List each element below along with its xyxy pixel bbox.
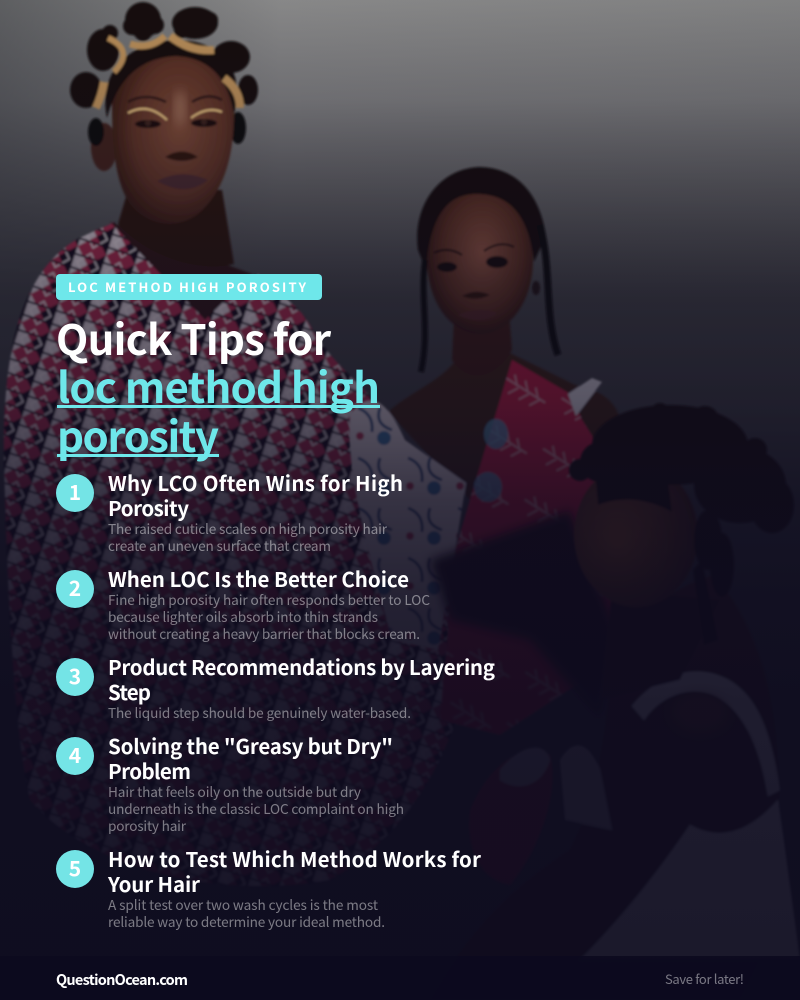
head: woman one — [112, 50, 234, 224]
tip 2 — [56, 563, 430, 643]
tip 4 body: Hair that feels oily on the outside but dry — [108, 781, 361, 801]
hair knots — [70, 2, 258, 108]
tip 2 body — [108, 589, 430, 643]
photo: woman two with braids — [349, 167, 630, 735]
tip 2 body: without creating a heavy barrier that blocks cream. — [108, 623, 420, 643]
number badge 4 — [56, 737, 94, 775]
shoulder highlight — [672, 692, 728, 732]
tip 2 heading: When LOC Is the Better Choice — [108, 563, 409, 593]
title — [56, 307, 380, 465]
number badge 3 — [56, 658, 94, 696]
number badge 1 — [56, 474, 94, 512]
chest skin: woman one — [110, 222, 252, 320]
garment: woman one — [4, 222, 470, 886]
tip 1 heading: Why LCO Often Wins for High — [108, 467, 403, 497]
tip 4 heading — [108, 730, 393, 785]
face features: woman two — [434, 244, 540, 320]
tip 3 body: The liquid step should be genuinely water-based. — [108, 702, 411, 722]
tip 5 body: A split test over two wash cycles is the most — [108, 894, 378, 914]
head: woman two — [427, 186, 533, 334]
tip 4 heading: Problem — [108, 755, 191, 785]
number badge 5 — [56, 850, 94, 888]
body and arm: woman three — [430, 575, 779, 1000]
title highlight line 1: loc method high — [57, 355, 380, 416]
neck: woman one — [118, 190, 234, 266]
tip 3 heading: Product Recommendations by Layering — [108, 651, 495, 681]
photo: woman one with bantu knots — [4, 2, 470, 886]
footer brand: QuestionOcean.com — [56, 969, 188, 990]
tip 1 heading: Porosity — [108, 492, 189, 522]
tip 2 body: Fine high porosity hair often responds better to LOC — [108, 589, 430, 609]
neck: woman two — [452, 300, 512, 375]
sleeve and garment detail — [469, 746, 612, 885]
head: woman three — [574, 463, 698, 607]
number badge 2 — [56, 570, 94, 608]
hair: woman two — [417, 167, 546, 270]
tag badge — [56, 274, 322, 300]
tip 4 body: porosity hair — [108, 815, 187, 835]
tip 1 body — [108, 518, 388, 555]
tip 5 body: reliable way to determine your ideal method. — [108, 911, 385, 931]
tip 4 body: underneath is the classic LOC complaint on high — [108, 798, 404, 818]
dress: blue flowers — [474, 419, 508, 502]
dress: white floral panel — [349, 400, 466, 650]
number badge 5: 5 — [69, 853, 81, 883]
footer save note: Save for later! — [665, 969, 744, 988]
tip 4 body — [108, 781, 404, 835]
shoulders: woman two — [388, 352, 622, 520]
tip 5 heading — [107, 843, 481, 898]
title highlight line 2: porosity — [57, 404, 219, 465]
tip 3 — [56, 651, 495, 722]
number badge 4: 4 — [69, 740, 81, 770]
footer band — [0, 956, 800, 1000]
tip 4 heading: Solving the "Greasy but Dry" — [108, 730, 393, 760]
ear and side hair — [88, 112, 246, 171]
dress: red floral panel — [440, 360, 630, 735]
tip 4 — [56, 730, 404, 835]
face features: woman one — [128, 90, 222, 189]
photo: woman three in front — [430, 403, 800, 1000]
neck: woman three — [600, 590, 720, 700]
tip 5 heading: Your Hair — [107, 868, 200, 898]
tip 3 heading: Step — [108, 676, 151, 706]
tip 2 body: because lighter oils absorb into thin strands — [108, 606, 378, 626]
number badge 1: 1 — [69, 477, 81, 507]
tip 5 — [56, 843, 481, 931]
number badge 2: 2 — [69, 573, 81, 603]
number badge 3: 3 — [69, 661, 81, 691]
tip 1 — [56, 467, 403, 555]
tip 1 body: The raised cuticle scales on high porosity hair — [108, 518, 388, 538]
braids — [421, 260, 425, 372]
tag badge: LOC METHOD HIGH POROSITY — [68, 277, 306, 296]
tip 5 heading: How to Test Which Method Works for — [108, 843, 481, 873]
title: Quick Tips for — [56, 307, 332, 368]
dress: strap — [568, 378, 602, 416]
hairline — [105, 40, 237, 118]
tip 5 body — [108, 894, 385, 931]
strap and dress: woman three — [580, 672, 800, 960]
hair: woman three — [569, 403, 794, 645]
tip 1 body: create an uneven surface that cream — [108, 535, 331, 555]
photo: central shadowed arm — [430, 510, 620, 720]
tip 1 heading — [108, 467, 403, 522]
tip 3 heading — [108, 651, 495, 706]
